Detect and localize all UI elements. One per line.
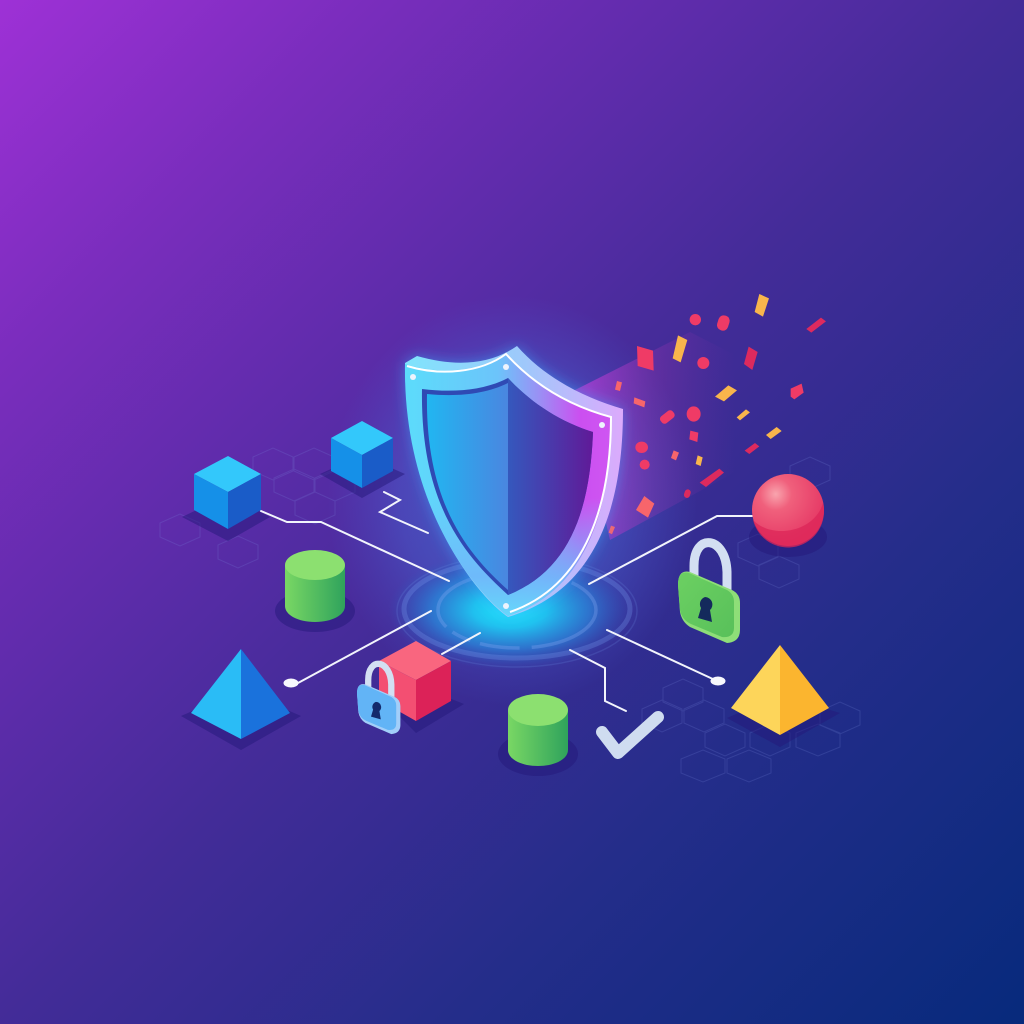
shield glow [405,346,623,617]
red sphere [752,474,824,547]
blue cube left [194,456,261,529]
red cube [379,641,451,721]
blue cube back [331,421,393,488]
hexagon floor pattern [160,448,860,782]
shield rim [405,353,611,616]
blue padlock [357,664,400,734]
holographic base [388,550,637,670]
yellow pyramid [731,645,829,735]
shadows under objects [181,455,840,776]
line end nodes [284,676,726,688]
check mark [602,717,658,753]
blue pyramid [191,649,290,739]
green padlock [678,543,740,643]
data particles [609,294,826,534]
circuit lines [261,492,752,711]
shield left half [427,383,508,590]
shield right half [508,378,593,595]
shield highlight line [407,354,611,612]
shield ambient halo [327,295,697,705]
shield depth edge [405,346,623,617]
particle beam behind shield [575,332,735,540]
shield inner border [422,378,593,595]
green cylinder left [285,550,345,622]
green cylinder bottom [508,694,568,766]
shield [405,346,623,617]
shield rivets [410,364,605,609]
